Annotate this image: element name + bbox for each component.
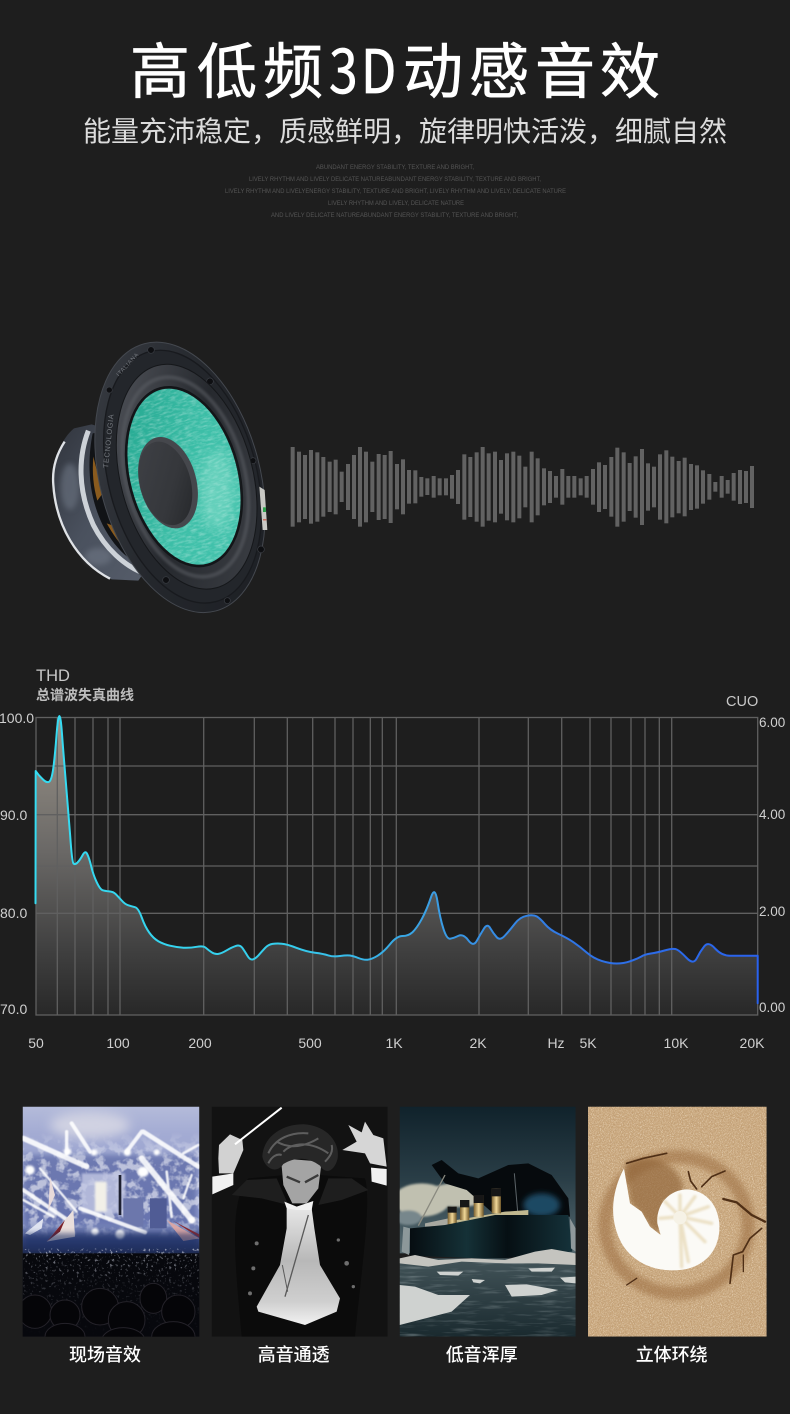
left axis labels: 90.0 — [0, 807, 27, 823]
english small print: AND LIVELY DELICATE NATUREABUNDANT ENERGY STABILITY, TEXTURE AND BRIGHT, — [271, 213, 518, 219]
icon: speaker driver — [53, 323, 293, 632]
curve area fill — [36, 716, 758, 1015]
frequency axis labels: 10K — [664, 1035, 689, 1051]
english small print: LIVELY RHYTHM AND LIVELY, DELICATE NATURE — [328, 201, 464, 207]
waveform left half — [291, 447, 527, 527]
speaker screw holes — [106, 347, 264, 604]
speaker basket openings — [93, 457, 131, 555]
chart title: THD — [36, 667, 70, 685]
frequency axis labels: 2K — [469, 1035, 487, 1051]
title: 3D — [329, 24, 396, 111]
right axis labels: 2.00 — [759, 904, 785, 919]
speaker frame lettering: TECNOLOGIA — [101, 413, 116, 469]
subtitle: 能量充沛稳定，质感鲜明，旋律明快活泼，细腻自然 — [83, 110, 727, 150]
photo: concert stage — [18, 1107, 199, 1354]
right axis labels — [759, 715, 785, 1015]
english small print: ABUNDANT ENERGY STABILITY, TEXTURE AND BRIGHT, — [316, 165, 474, 171]
chart title — [36, 667, 134, 705]
speaker magnet — [53, 424, 157, 581]
english small print: LIVELY RHYTHM AND LIVELYENERGY STABILITY, TEXTURE AND BRIGHT, LIVELY RHYTHM AND LIVELY, DELICATE NATURE — [225, 189, 566, 195]
speaker frame lettering: ITALIANA — [116, 352, 141, 378]
chart grid — [36, 718, 758, 1015]
chart: THD curve — [0, 667, 785, 1051]
english small print — [225, 165, 566, 219]
frequency axis labels — [28, 1035, 765, 1051]
right axis title: CUO — [726, 694, 758, 710]
right axis labels: 6.00 — [759, 715, 785, 730]
left axis labels — [0, 710, 34, 1017]
chart title: 总谱波失真曲线 — [36, 685, 134, 705]
speaker dust cap — [129, 430, 207, 535]
speaker label sticker — [259, 487, 267, 530]
speaker frame — [67, 323, 293, 632]
left axis labels: 70.0 — [0, 1001, 27, 1017]
frequency axis labels: 20K — [740, 1035, 765, 1051]
captions: 低音浑厚 — [446, 1341, 518, 1367]
left axis labels: 80.0 — [0, 905, 27, 921]
sound waveform — [291, 447, 754, 527]
speaker surround — [93, 349, 280, 605]
right axis labels: 0.00 — [759, 1000, 785, 1015]
photo: orchestra conductor — [212, 1107, 388, 1337]
captions: 现场音效 — [69, 1341, 141, 1367]
frequency axis labels: Hz — [547, 1035, 565, 1051]
title: 高低频 — [130, 24, 323, 111]
title: 动感音效 — [403, 24, 660, 111]
title — [130, 24, 660, 111]
left axis labels: 100.0 — [0, 710, 34, 726]
captions: 高音通透 — [258, 1341, 330, 1367]
frequency axis labels: 50 — [28, 1035, 44, 1051]
captions: 立体环绕 — [636, 1341, 708, 1367]
frequency axis labels: 500 — [298, 1035, 322, 1051]
frequency axis labels: 200 — [188, 1035, 212, 1051]
speaker frame lettering — [101, 352, 141, 469]
speaker cone — [106, 373, 262, 581]
THD curve line — [36, 716, 758, 1003]
right axis labels: 4.00 — [759, 807, 785, 822]
photo: nautilus shell in sand — [588, 1107, 767, 1337]
photo: piano ship on ice — [393, 1107, 576, 1337]
frequency axis labels: 1K — [385, 1035, 403, 1051]
english small print: LIVELY RHYTHM AND LIVELY DELICATE NATUREABUNDANT ENERGY STABILITY, TEXTURE AND BRIGHT, — [249, 177, 541, 183]
captions — [69, 1341, 708, 1367]
frequency axis labels: 100 — [106, 1035, 130, 1051]
waveform right half — [530, 448, 754, 527]
frequency axis labels: 5K — [579, 1035, 597, 1051]
